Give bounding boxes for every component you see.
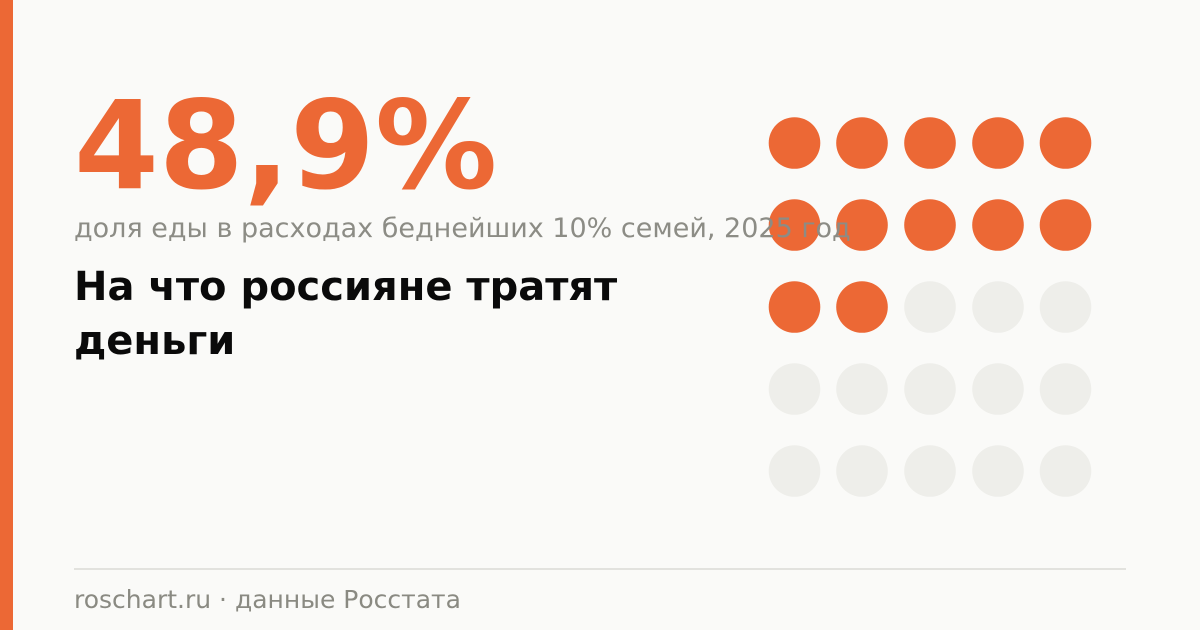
dot grid chart [768,117,1092,496]
accent bar [0,0,13,630]
heading: деньги [74,318,235,364]
subtitle: доля еды в расходах беднейших 10% семей, 2025 год [74,213,851,244]
big number: 48,9% [74,75,497,217]
footer source: roschart.ru · данные Росстата [74,585,461,614]
heading: На что россияне тратят [74,264,617,310]
heading [74,264,617,364]
footer rule [74,568,1126,570]
